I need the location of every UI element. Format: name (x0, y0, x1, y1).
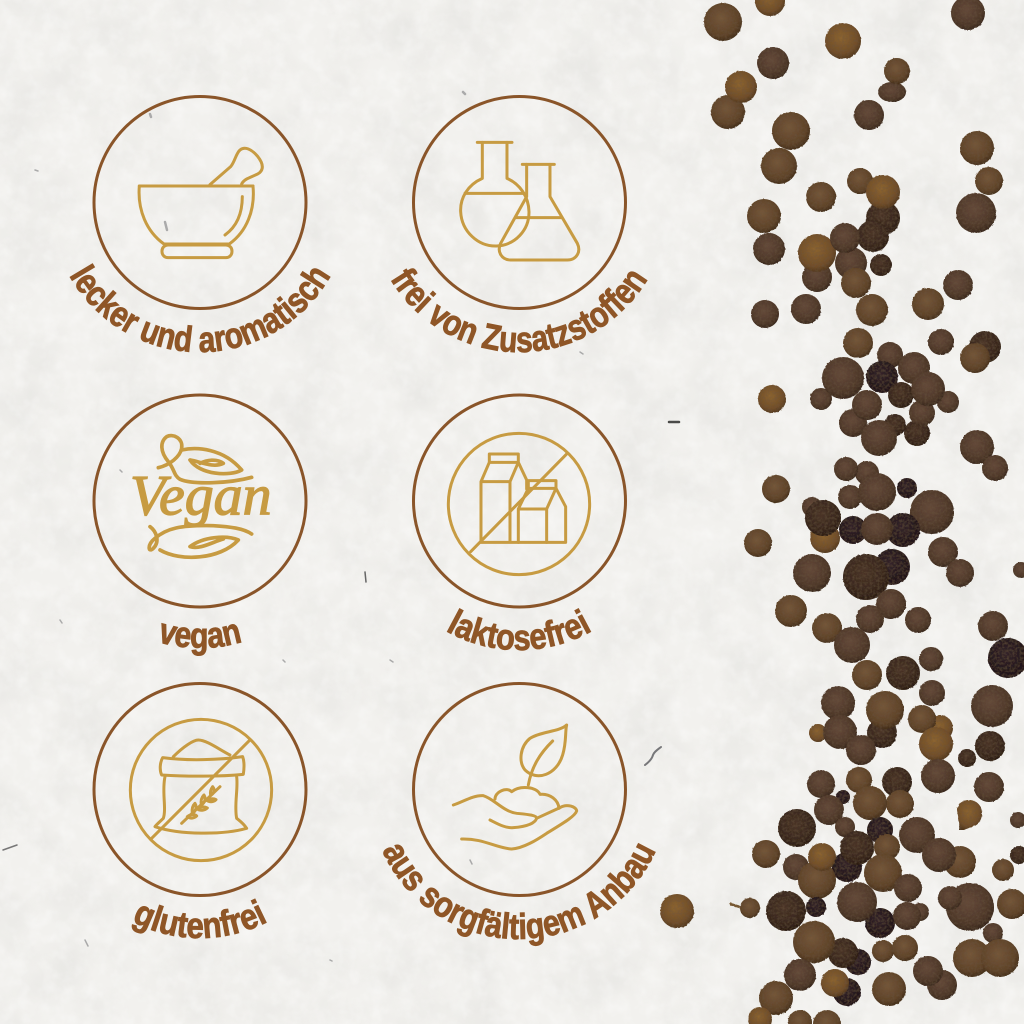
berries: top cluster (704, 0, 1003, 328)
ring (414, 96, 626, 308)
panel: laktosefrei (412, 394, 627, 651)
icon: mortar and pestle (139, 148, 262, 258)
ring (94, 395, 306, 607)
ring (94, 96, 306, 308)
label: aus sorgfältigem Anbau (383, 842, 656, 946)
label: vegan (161, 622, 242, 656)
label: laktosefrei (446, 608, 592, 651)
icon: crossed-out flour sack (130, 719, 272, 861)
label: frei von Zusatzstoffen (391, 268, 648, 353)
icon: hand with sprout (453, 725, 577, 849)
allspice berries column (660, 0, 1024, 1024)
icon: crossed-out milk cartons (448, 433, 590, 575)
icon: vegan lettering with leaves: Vegan (130, 464, 272, 527)
panel: aus sorgfältigem Anbau (383, 682, 656, 946)
label: lecker und aromatisch (70, 263, 331, 353)
ring (414, 684, 626, 896)
panel: frei von Zusatzstoffen (391, 95, 648, 353)
panel: lecker und aromatisch (70, 95, 331, 353)
ring (94, 684, 306, 896)
icon: laboratory flasks (461, 142, 579, 260)
icon: vegan lettering with leaves (130, 436, 272, 557)
ring (414, 395, 626, 607)
label: glutenfrei (132, 898, 267, 939)
panel: glutenfrei (92, 682, 308, 939)
berries: bottom cluster (660, 660, 1024, 1024)
panel: vegan (92, 394, 308, 656)
berries: middle cluster (744, 328, 1024, 690)
